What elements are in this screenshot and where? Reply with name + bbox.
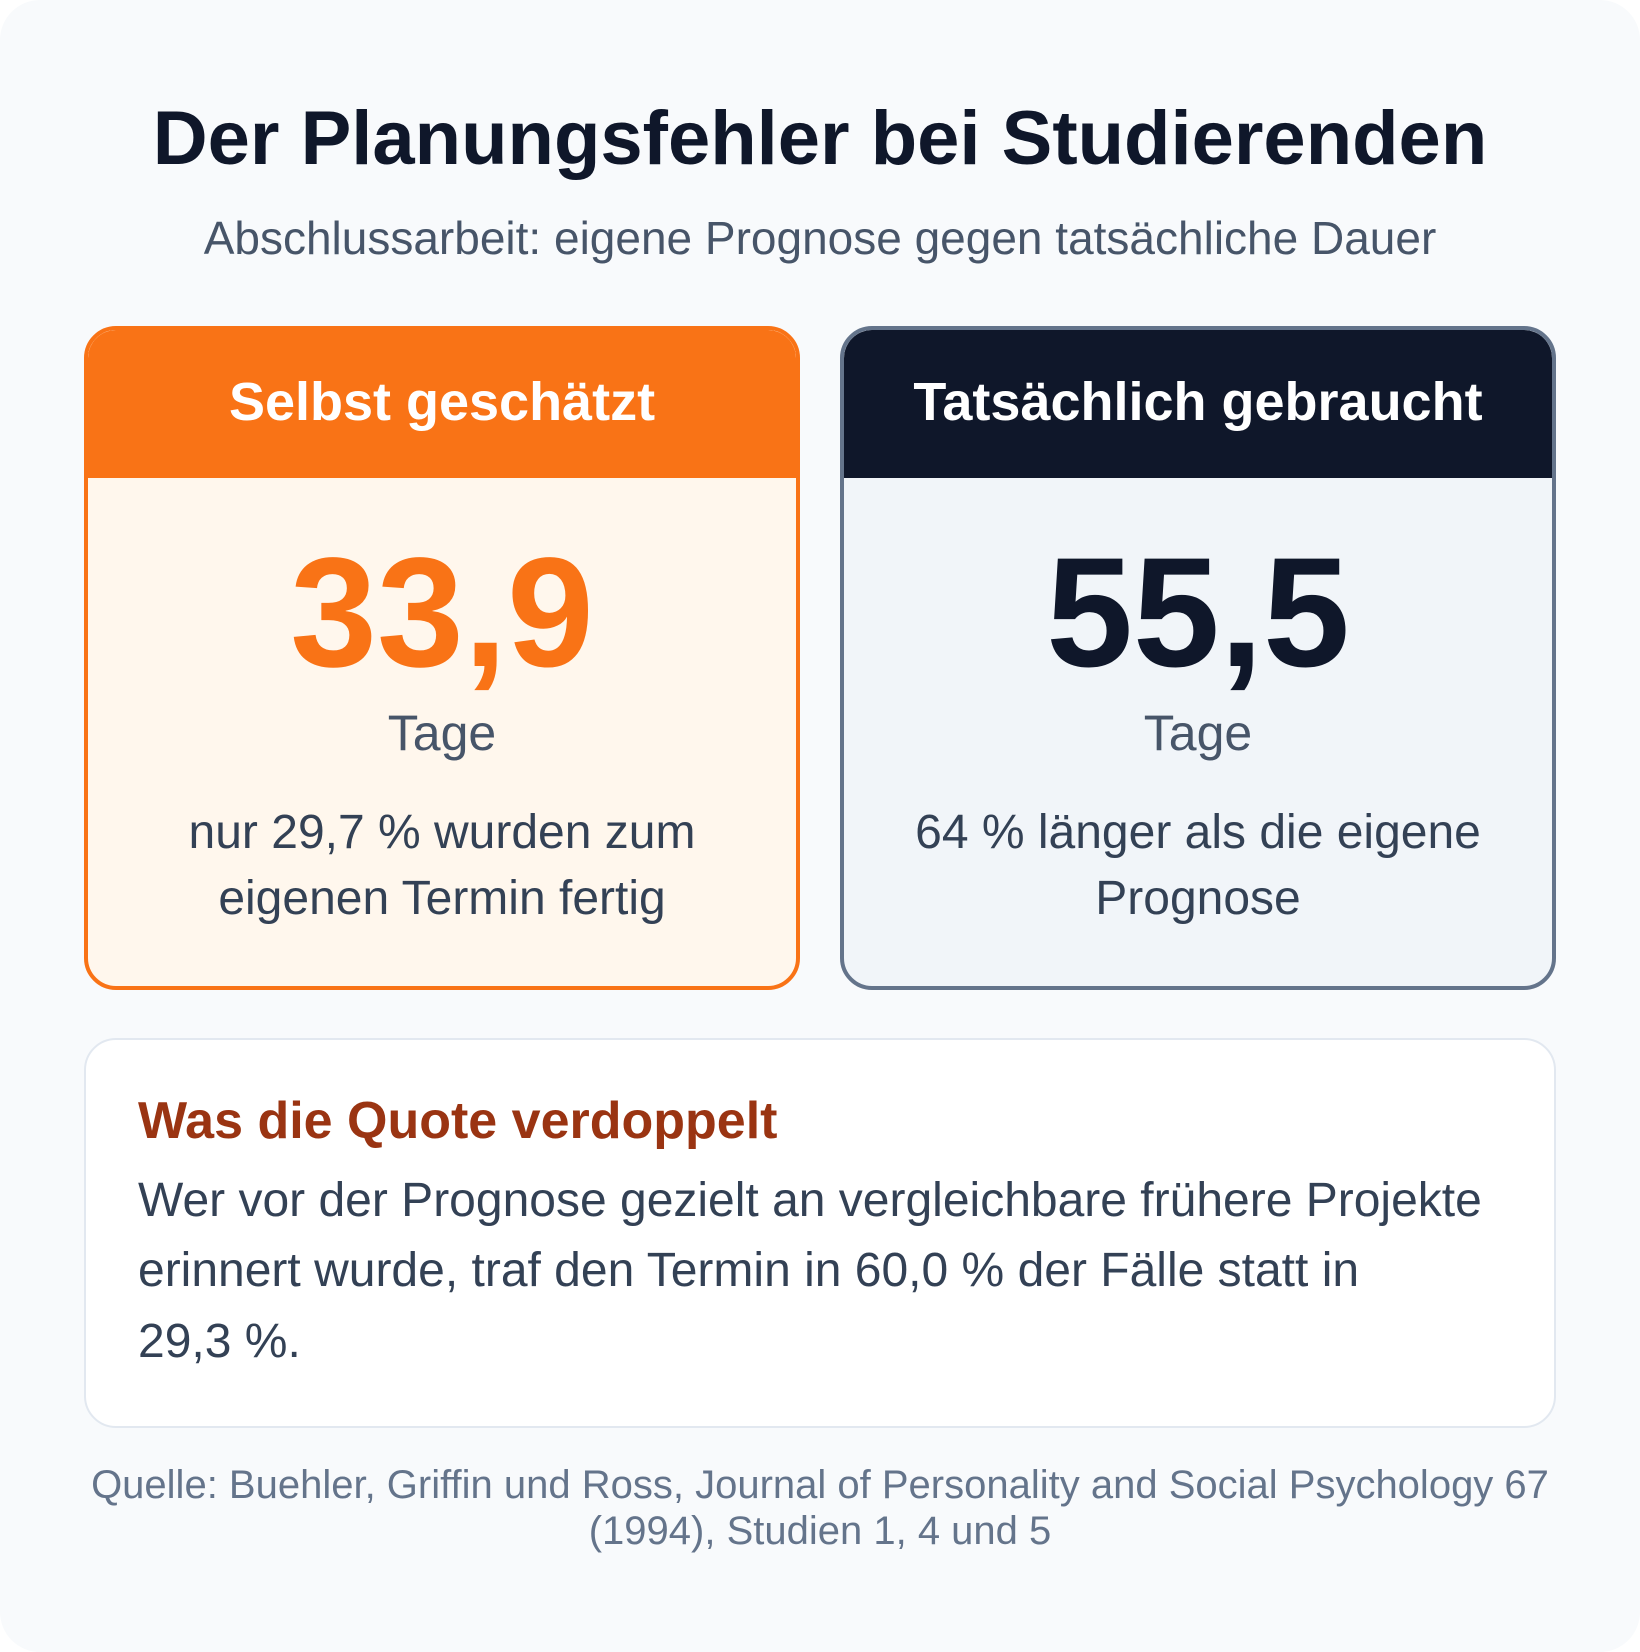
- big number: 33,9: 33,9: [290, 526, 594, 700]
- note: on-time share: [189, 806, 695, 925]
- callout heading: Was die Quote verdoppelt: [138, 1092, 778, 1150]
- source note: [91, 1463, 1549, 1553]
- panel header: actual: [844, 330, 1552, 478]
- unit label: Tage: [1144, 705, 1252, 761]
- note: longer than forecast: Prognose: [1095, 872, 1301, 925]
- callout body text: [138, 1174, 1482, 1368]
- panel header: self-estimated: [88, 330, 796, 478]
- panel header: actual: Tatsächlich gebraucht: [913, 372, 1483, 432]
- note: longer than forecast: 64 % länger als die eigene: [915, 806, 1481, 858]
- note: on-time share: nur 29,7 % wurden zum: [189, 806, 695, 858]
- unit label: Tage: [388, 705, 496, 761]
- source note: (1994), Studien 1, 4 und 5: [589, 1509, 1051, 1553]
- panel: self-estimated: [84, 326, 800, 990]
- title: Der Planungsfehler bei Studierenden: [153, 96, 1487, 181]
- callout body text: erinnert wurde, traf den Termin in 60,0 % der Fälle statt in: [138, 1244, 1359, 1297]
- panel header: self-estimated: Selbst geschätzt: [229, 372, 655, 432]
- callout panel: [84, 1038, 1556, 1428]
- source note: Quelle: Buehler, Griffin und Ross, Journal of Personality and Social Psychology 67: [91, 1463, 1549, 1507]
- note: longer than forecast: [915, 806, 1481, 925]
- big number: 55,5: 55,5: [1046, 526, 1350, 700]
- callout body text: Wer vor der Prognose gezielt an vergleichbare frühere Projekte: [138, 1174, 1482, 1227]
- callout body text: 29,3 %.: [138, 1315, 301, 1368]
- panel: actual duration: [840, 326, 1556, 990]
- note: on-time share: eigenen Termin fertig: [218, 872, 666, 925]
- subtitle: Abschlussarbeit: eigene Prognose gegen tatsächliche Dauer: [204, 212, 1436, 264]
